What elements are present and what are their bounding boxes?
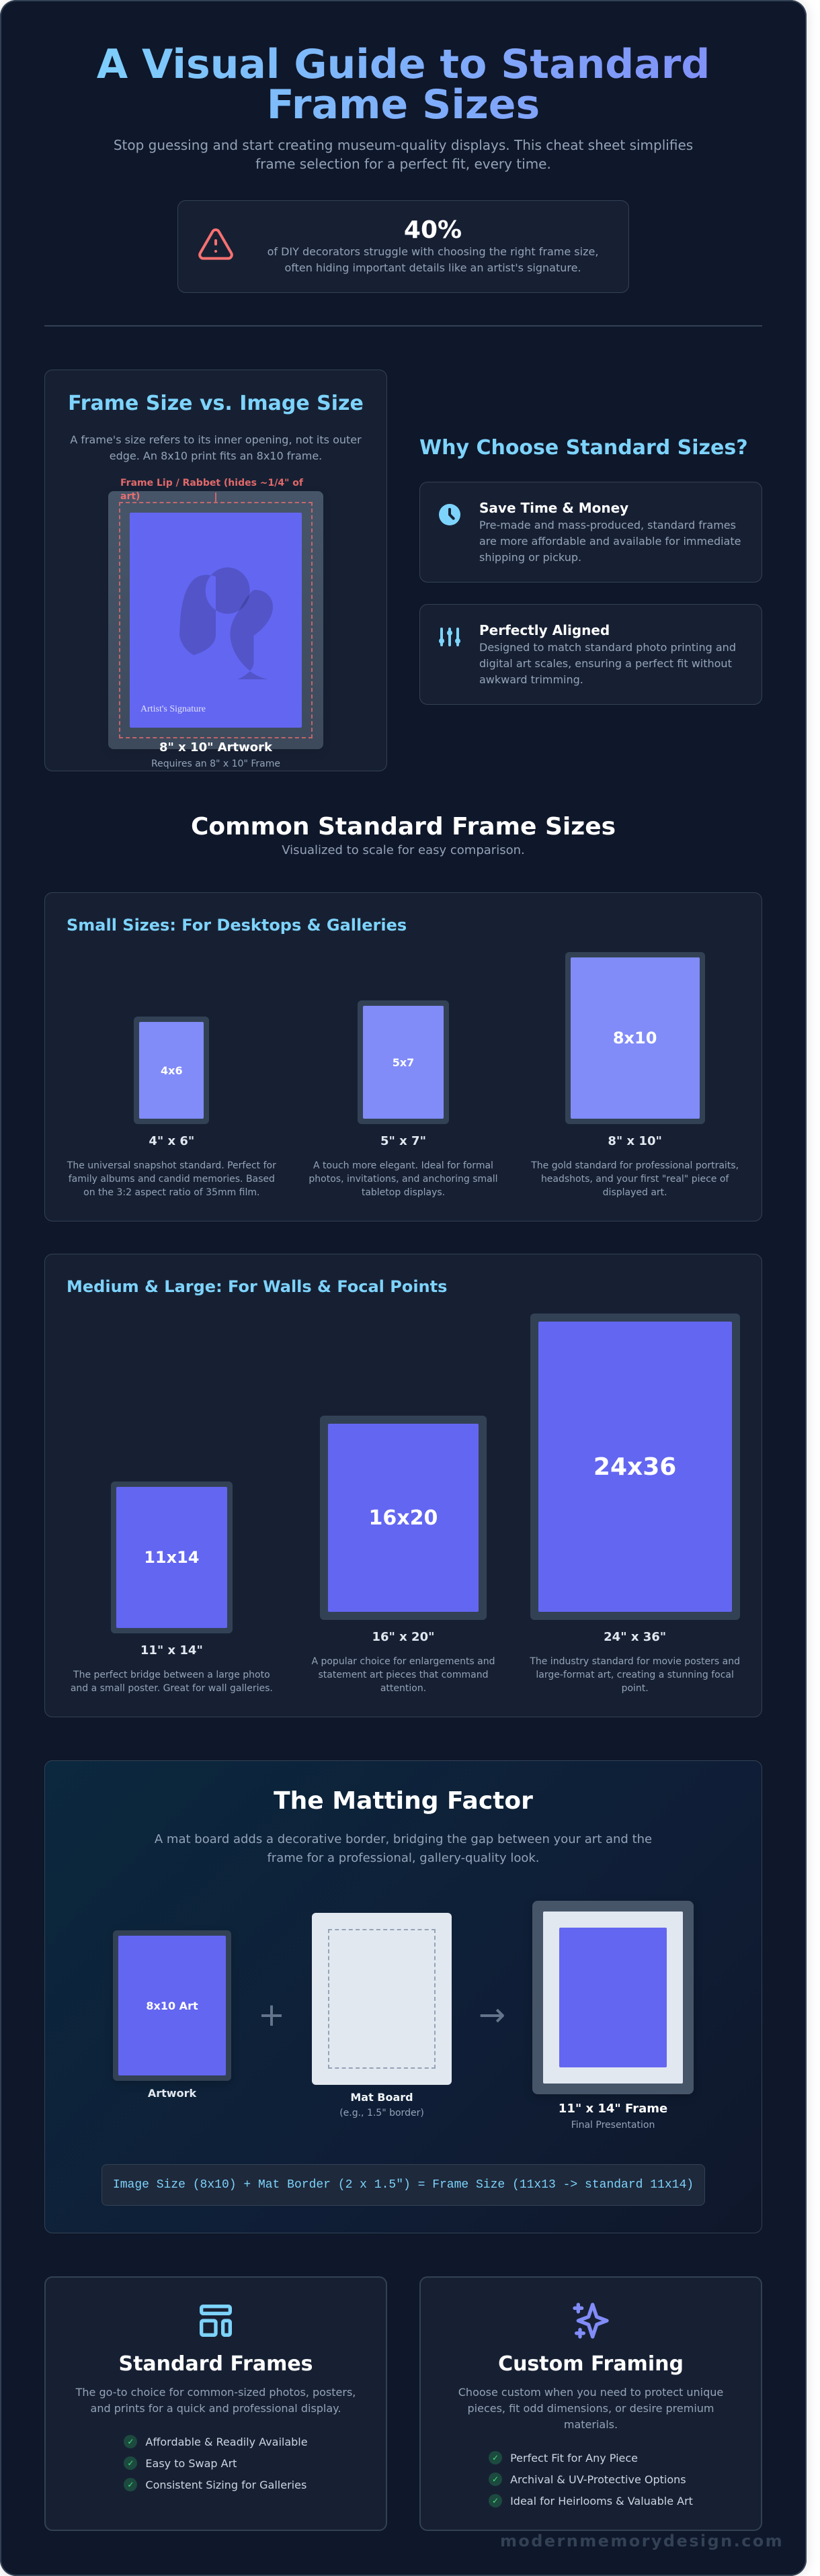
panel: custom framing (419, 2276, 762, 2531)
icon: warning triangle (198, 228, 233, 260)
panel description (155, 1832, 652, 1865)
feature list: Consistent Sizing for Galleries (145, 2478, 306, 2491)
size item: 16x20: A popular choice for enlargements and (311, 1656, 495, 1667)
heading: why choose standard sizes: Why Choose Standard Sizes? (419, 436, 748, 460)
title: Frame Sizes (267, 81, 540, 128)
rabbet tick (215, 492, 216, 502)
size item: 8x10: headshots, and your first "real" piece of (541, 1174, 729, 1185)
feature list: Perfect Fit for Any Piece (510, 2451, 638, 2464)
arrow: → (479, 1996, 505, 2034)
icon: sparkles (573, 2303, 609, 2339)
panel: 40% statistic callout (177, 200, 629, 293)
icon: clock (439, 504, 460, 525)
artwork frame (113, 1930, 231, 2081)
size item: 5x7: A touch more elegant. Ideal for formal (313, 1160, 493, 1171)
size item: 5x7: 5" x 7" (380, 1134, 426, 1148)
feature list: ✓ (127, 2437, 134, 2446)
size comparison row (71, 1314, 740, 1694)
size item: 16x20: 16x20 (369, 1506, 438, 1529)
size item: 5x7 (309, 1000, 498, 1198)
feature list: ✓ (492, 2496, 499, 2505)
step: mat board (312, 1913, 452, 2118)
panel: medium and large sizes (44, 1254, 762, 1717)
stat number: 40% (404, 216, 462, 244)
size item: 24x36: 24x36 (593, 1453, 676, 1481)
icon: sliders (439, 628, 460, 646)
title (44, 44, 762, 125)
size item: 11x14 (71, 1482, 273, 1694)
card description (75, 2386, 356, 2415)
stat description: often hiding important details like an artist's signature. (284, 261, 581, 274)
card description: pieces, fit odd dimensions, or desire premium (468, 2402, 714, 2415)
panel heading: Small Sizes: For Desktops & Galleries (67, 916, 407, 935)
panel: perfectly aligned (419, 604, 762, 705)
benefit title: Save Time & Money (479, 500, 628, 516)
panel: the matting factor (44, 1760, 762, 2233)
section subtitle: Visualized to scale for easy comparison. (282, 843, 525, 857)
size item: 24x36: 24" x 36" (604, 1630, 666, 1644)
size item: 4x6: family albums and candid memories. Based (69, 1174, 275, 1185)
rabbet label: Frame Lip / Rabbet (hides ~1/4" of (120, 478, 303, 488)
feature list: Ideal for Heirlooms & Valuable Art (510, 2494, 693, 2507)
section heading: common sizes: Common Standard Frame Sizes (191, 813, 616, 841)
feature list: Archival & UV-Protective Options (510, 2473, 686, 2486)
artwork label: Artwork (148, 2087, 196, 2100)
stat description: of DIY decorators struggle with choosing the right frame size, (268, 245, 598, 258)
rabbet label: art) (120, 491, 140, 502)
size item: 8x10: displayed art. (603, 1187, 667, 1198)
size item: 4x6: on the 3:2 aspect ratio of 35mm film. (83, 1187, 259, 1198)
size item: 4x6 (67, 1017, 276, 1198)
step: artwork (113, 1930, 231, 2100)
card title: Custom Framing (498, 2352, 684, 2376)
benefit description: Pre-made and mass-produced, standard frames (479, 519, 736, 531)
benefit description: shipping or pickup. (479, 551, 581, 564)
card description (458, 2386, 723, 2431)
card title: Standard Frames (118, 2352, 313, 2376)
signature text: Artist's Signature (140, 704, 206, 714)
formula: Image Size (8x10) + Mat Border (2 x 1.5") = Frame Size (11x13 -> standard 11x14) (113, 2178, 694, 2192)
panel heading: Frame Size vs. Image Size (68, 392, 364, 415)
panel heading: Medium & Large: For Walls & Focal Points (67, 1277, 447, 1296)
final label: 11" x 14" Frame (559, 2102, 667, 2116)
size item: 5x7: 5x7 (393, 1056, 414, 1068)
benefit description: are more affordable and available for immediate (479, 535, 741, 548)
panel description: A mat board adds a decorative border, bridging the gap between your art and the (155, 1832, 652, 1846)
panel description: frame for a professional, gallery-quality look. (267, 1851, 540, 1865)
size comparison row (67, 952, 739, 1198)
feature list: ✓ (127, 2458, 134, 2468)
feature list: ✓ (492, 2453, 499, 2462)
size item: 8x10: The gold standard for professional portraits, (531, 1160, 739, 1171)
size item: 16x20: 16" x 20" (372, 1630, 434, 1644)
size item: 5x7: tabletop displays. (362, 1187, 445, 1198)
size item: 24x36: The industry standard for movie posters and (530, 1656, 740, 1667)
feature list (124, 2435, 308, 2491)
size item: 11x14: 11" x 14" (140, 1643, 203, 1658)
panel description (70, 433, 362, 462)
artwork with abstract figure (130, 513, 302, 728)
size item: 8x10 (531, 952, 739, 1198)
size item: 4x6: 4" x 6" (149, 1134, 194, 1148)
subtitle: Stop guessing and start creating museum-quality displays. This cheat sheet simplifies (114, 137, 693, 153)
final note: Final Presentation (571, 2120, 655, 2131)
size item: 4x6: 4x6 (161, 1064, 183, 1076)
step: final frame (532, 1901, 694, 2131)
frame diagram (108, 491, 323, 749)
feature list: ✓ (127, 2480, 134, 2489)
benefit description: awkward trimming. (479, 673, 583, 686)
icon: layout (200, 2305, 232, 2337)
feature list: Affordable & Readily Available (145, 2435, 308, 2448)
final framed art (532, 1901, 694, 2094)
size item: 11x14: The perfect bridge between a large photo (73, 1670, 270, 1680)
abstract art shape (179, 567, 273, 679)
size item: 5x7: photos, invitations, and anchoring small (309, 1174, 498, 1185)
artwork caption: 8" x 10" Artwork (159, 740, 272, 755)
mat label: Mat Board (350, 2091, 413, 2104)
size item: 16x20 (311, 1416, 495, 1694)
benefit description: digital art scales, ensuring a perfect fit without (479, 657, 732, 670)
size item: 11x14: and a small poster. Great for wall galleries. (71, 1683, 273, 1694)
frame requirement caption: Requires an 8" x 10" Frame (151, 759, 280, 769)
card description: and prints for a quick and professional display. (91, 2402, 341, 2415)
mat note: (e.g., 1.5" border) (339, 2108, 424, 2118)
panel: small sizes (44, 892, 762, 1221)
card description: materials. (564, 2418, 618, 2431)
artwork frame: 8x10 Art (146, 2000, 198, 2012)
size item: 16x20: attention. (380, 1683, 426, 1694)
size item: 8x10: 8" x 10" (608, 1134, 662, 1148)
watermark: modernmemorydesign.com (500, 2532, 784, 2550)
title: A Visual Guide to Standard (97, 41, 710, 88)
subtitle: frame selection for a perfect fit, every time. (255, 156, 551, 172)
panel: save time and money (419, 482, 762, 583)
rabbet dashed outline (119, 502, 313, 738)
benefit description (479, 641, 736, 686)
size item: 11x14: 11x14 (144, 1548, 199, 1567)
formula (101, 2164, 705, 2206)
size item: 24x36 (530, 1314, 740, 1694)
size item: 24x36: point. (622, 1683, 649, 1694)
size item: 16x20: statement art pieces that command (318, 1670, 488, 1680)
card description: Choose custom when you need to protect unique (458, 2386, 723, 2399)
mat board (312, 1913, 452, 2085)
card description: The go-to choice for common-sized photos, posters, (76, 2386, 356, 2399)
subtitle (114, 137, 693, 172)
feature list: Easy to Swap Art (145, 2456, 237, 2470)
benefit title: Perfectly Aligned (479, 622, 610, 638)
panel description: A frame's size refers to its inner opening, not its outer (70, 433, 362, 446)
size item: 4x6: The universal snapshot standard. Perfect for (67, 1160, 276, 1171)
benefit description: Designed to match standard photo printing and (479, 641, 736, 654)
panel description: edge. An 8x10 print fits an 8x10 frame. (110, 449, 322, 462)
size item: 8x10: 8x10 (613, 1029, 657, 1047)
panel: standard frames (44, 2276, 387, 2531)
stat description (268, 245, 598, 274)
feature list: ✓ (492, 2475, 499, 2484)
rabbet label (120, 478, 304, 502)
plus sign: + (258, 1996, 285, 2034)
panel heading: The Matting Factor (274, 1787, 533, 1815)
divider (44, 325, 762, 327)
benefit description (479, 519, 741, 564)
feature list (489, 2451, 693, 2507)
panel: frame size vs image size (44, 370, 387, 771)
size item: 24x36: large-format art, creating a stunning focal (536, 1670, 734, 1680)
